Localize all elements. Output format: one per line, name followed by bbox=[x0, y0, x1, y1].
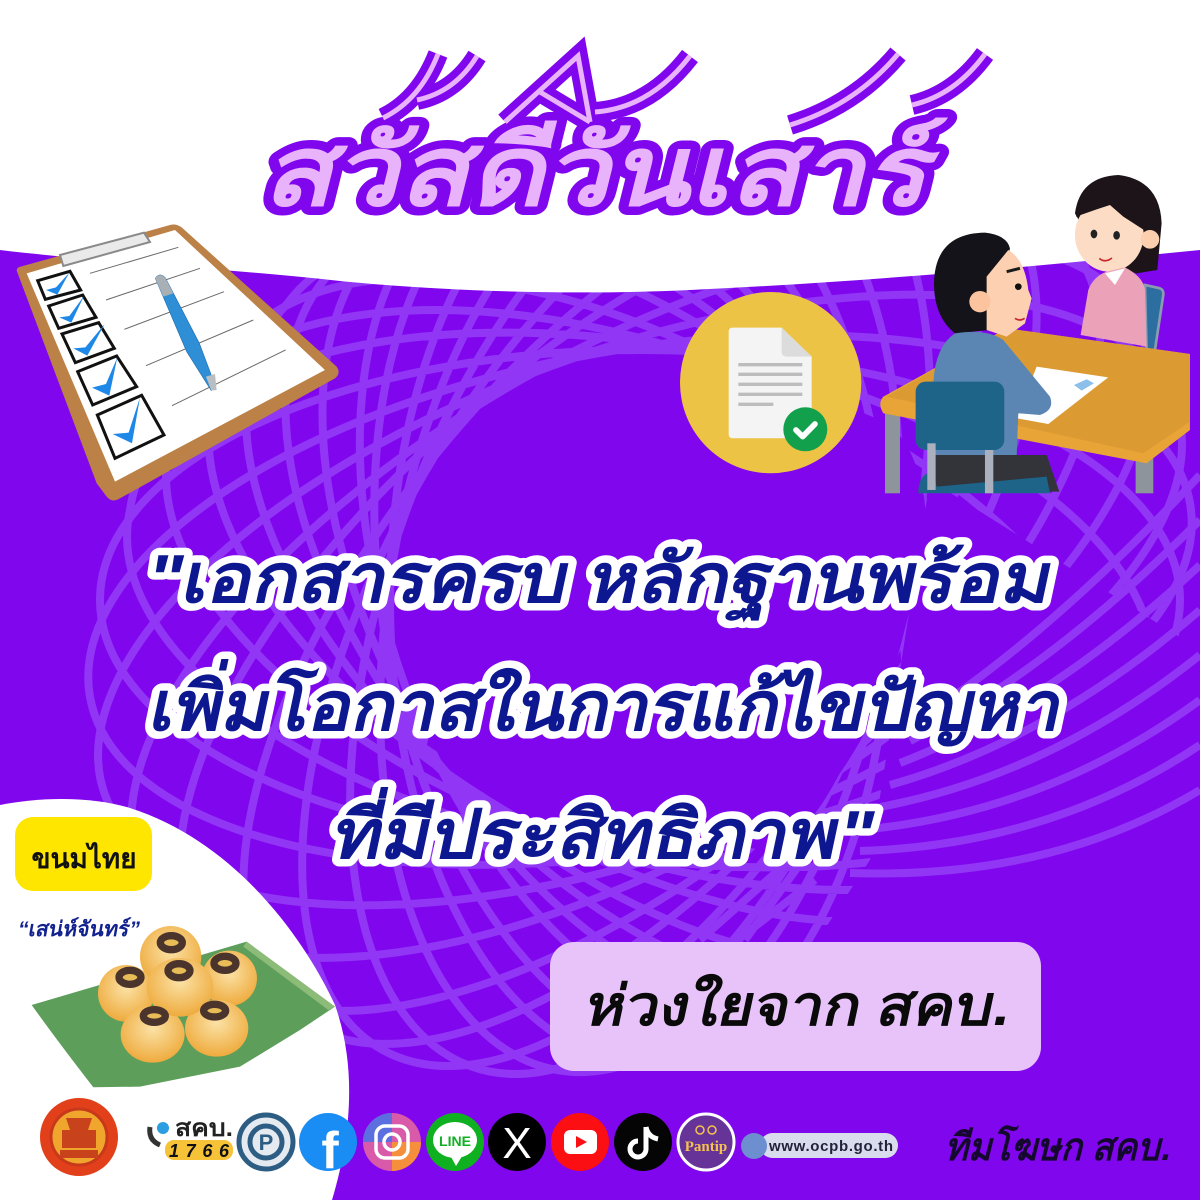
icon: YouTube bbox=[551, 1113, 609, 1171]
white bottom-left corner panel bbox=[0, 799, 349, 1200]
icon: X bbox=[488, 1113, 546, 1171]
icon: TikTok bbox=[614, 1113, 672, 1171]
seal logo bbox=[40, 1098, 118, 1176]
man bbox=[916, 233, 1059, 493]
website pill bbox=[741, 1133, 898, 1159]
clip bbox=[60, 233, 150, 266]
title: สวัสดีวันเสาร์ bbox=[257, 116, 950, 227]
line 1: "เอกสารครบ หลักฐานพร้อม bbox=[139, 541, 1062, 623]
website pill: www.ocpb.go.th bbox=[768, 1138, 893, 1155]
icon: CPB: P bbox=[259, 1130, 273, 1155]
icon: Pantip bbox=[678, 1114, 734, 1170]
paper bbox=[1017, 367, 1108, 424]
icon: LINE: LINE bbox=[439, 1133, 471, 1149]
icon: Instagram bbox=[363, 1113, 421, 1171]
pen bbox=[155, 275, 217, 391]
callout pill: ห่วงใยจาก สคบ. bbox=[580, 974, 1018, 1037]
table bbox=[880, 328, 1190, 493]
icon: Pantip: Pantip bbox=[685, 1139, 727, 1155]
hotline logo bbox=[150, 1115, 233, 1161]
icon: CPB bbox=[239, 1115, 293, 1169]
illustration: Thai desserts on banana leaf bbox=[32, 926, 335, 1087]
illustration: consultation at desk bbox=[880, 175, 1190, 493]
social icons bbox=[239, 1113, 898, 1180]
icon: document approved bbox=[680, 292, 861, 473]
clipboard paper bbox=[27, 230, 325, 482]
yellow label: ขนมไทย bbox=[32, 842, 136, 874]
white top band bbox=[0, 0, 1200, 292]
callout pill bbox=[550, 942, 1041, 1071]
checkboxes bbox=[38, 271, 164, 458]
icon: clipboard with checklist bbox=[17, 225, 339, 500]
quote text bbox=[139, 541, 1074, 873]
title bbox=[257, 54, 985, 227]
icon: Facebook: f bbox=[321, 1122, 339, 1180]
dessert name: “เสน่ห์จันทร์” bbox=[16, 916, 142, 941]
signature: ทีมโฆษก สคบ. bbox=[942, 1125, 1178, 1169]
icon: Facebook bbox=[299, 1113, 357, 1180]
line 3: ที่มีประสิทธิภาพ" bbox=[327, 787, 885, 873]
clipboard board bbox=[17, 225, 339, 500]
yellow label bbox=[15, 817, 152, 891]
hotline logo: สคบ. bbox=[175, 1115, 233, 1142]
line 2: เพิ่มโอกาสในการแก้ไขปัญหา bbox=[143, 659, 1074, 747]
woman bbox=[1075, 175, 1163, 350]
icon: LINE bbox=[426, 1113, 484, 1171]
icon: X: X bbox=[502, 1119, 532, 1168]
hotline logo: 1766 bbox=[169, 1141, 230, 1161]
